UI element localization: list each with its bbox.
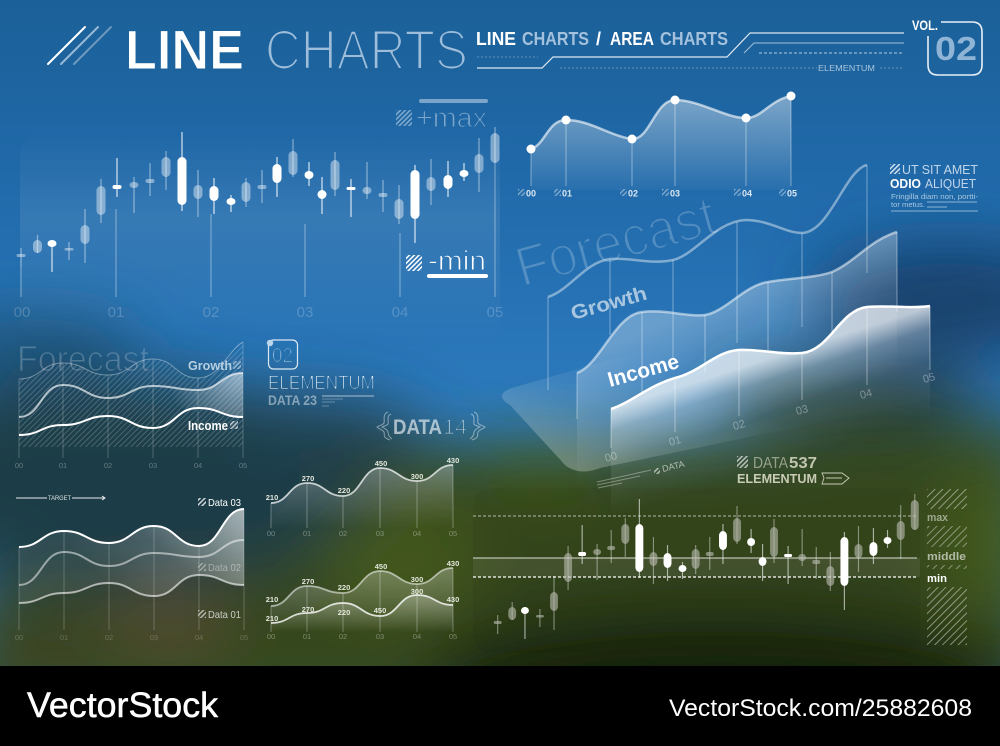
data537 label — [737, 455, 849, 486]
series chart axis: 05 — [240, 633, 248, 642]
double chart values: 220 — [338, 583, 350, 592]
series labels: Data 03 — [208, 497, 241, 509]
double chart axis: 03 — [376, 632, 384, 641]
chart: forecast small — [19, 342, 243, 458]
series labels — [198, 497, 241, 621]
double chart axis: 04 — [413, 632, 421, 641]
chart: three series — [19, 509, 244, 630]
area chart mid — [271, 465, 453, 528]
axis labels top chart: 00 — [14, 304, 30, 321]
double chart values: 270 — [302, 605, 314, 614]
text block top right: Fringilla diam non, portti- — [891, 192, 979, 201]
target arrow: TARGET — [48, 496, 71, 502]
forecast small axis: 01 — [59, 461, 67, 470]
panel: candlestick chart top — [20, 135, 500, 340]
volume badge — [912, 18, 982, 75]
perspective labels — [568, 283, 682, 392]
series labels: Data 02 — [208, 562, 241, 574]
forecast small axis: 00 — [15, 461, 23, 470]
perspective labels: Income — [605, 350, 682, 392]
text block top right: tor metus. — [891, 200, 925, 209]
title: LINE — [125, 18, 244, 81]
double chart values: 220 — [338, 608, 350, 617]
mid chart values: 430 — [447, 456, 459, 465]
footer logo: VectorStock — [27, 686, 219, 725]
legend bottom candle chart — [927, 489, 967, 645]
elementum block: DATA 23 — [268, 392, 317, 408]
mid chart values: 450 — [375, 459, 387, 468]
mid chart axis: 01 — [303, 529, 311, 538]
footer url: VectorStock.com/25882608 — [669, 695, 972, 722]
data14 heading: 14 — [443, 416, 467, 439]
elementum tag: ELEMENTUM — [818, 64, 875, 73]
logo stripes — [48, 27, 111, 64]
double chart values: 210 — [266, 595, 278, 604]
mid chart axis — [267, 529, 457, 538]
candlestick chart bottom — [494, 494, 919, 639]
data537 label: ELEMENTUM — [737, 472, 817, 486]
mid chart axis: 04 — [413, 529, 421, 538]
elementum block: 02 — [272, 345, 293, 367]
panel: candlestick chart bottom — [473, 488, 920, 653]
small data note — [597, 459, 685, 488]
data537 label: DATA — [753, 455, 789, 472]
elementum block: ELEMENTUM — [268, 372, 375, 394]
axis labels top chart: 05 — [487, 304, 503, 321]
mid chart values — [266, 456, 459, 502]
perspective forecast title: Forecast — [508, 183, 723, 299]
forecast small axis: 02 — [104, 461, 112, 470]
subtitle: / — [596, 29, 601, 49]
data14 heading — [377, 412, 485, 440]
double chart values: 300 — [411, 587, 423, 596]
axis labels top chart: 04 — [392, 304, 408, 321]
mid chart axis: 05 — [449, 529, 457, 538]
forecast small labels: Growth — [188, 359, 232, 373]
text block top right — [890, 162, 979, 211]
series chart axis: 02 — [105, 633, 113, 642]
text block top right: UT SIT AMET — [902, 162, 978, 177]
axis labels top chart: 02 — [203, 304, 219, 321]
double chart axis: 05 — [449, 632, 457, 641]
text block top right: ALIQUET — [925, 176, 976, 191]
perspective axis labels: 01 — [668, 434, 683, 449]
area chart top right: 01 — [562, 188, 572, 198]
series chart axis: 03 — [150, 633, 158, 642]
double chart values: 430 — [447, 559, 459, 568]
small forecast title: Forecast — [17, 338, 149, 379]
area chart double — [271, 568, 453, 632]
double chart values: 450 — [374, 606, 386, 615]
elementum block — [267, 340, 375, 408]
mid chart axis: 02 — [339, 529, 347, 538]
axis labels top chart — [14, 304, 503, 321]
mid chart values: 210 — [266, 493, 278, 502]
series chart axis: 04 — [195, 633, 203, 642]
perspective axis labels: 03 — [795, 403, 810, 418]
subtitle: AREA — [610, 29, 654, 49]
max label: +max — [416, 102, 487, 133]
double chart values: 300 — [411, 575, 423, 584]
max label — [396, 99, 488, 133]
reference band — [473, 558, 920, 577]
mid chart axis: 03 — [376, 529, 384, 538]
area chart top right: 02 — [628, 188, 638, 198]
series chart axis: 01 — [60, 633, 68, 642]
double chart axis: 01 — [303, 632, 311, 641]
series labels: Data 01 — [208, 609, 241, 621]
target arrow — [16, 496, 105, 502]
mid chart axis: 00 — [267, 529, 275, 538]
subtitle: CHARTS — [522, 29, 589, 49]
legend bottom candle chart: min — [927, 573, 947, 585]
axis labels top chart: 03 — [297, 304, 313, 321]
candlestick chart top — [16, 127, 500, 297]
volume badge: 02 — [935, 30, 977, 67]
double chart axis — [267, 632, 457, 641]
double chart values: 450 — [375, 562, 387, 571]
area chart top right: 05 — [787, 188, 797, 198]
double chart values — [266, 559, 459, 623]
forecast small labels: Income — [188, 419, 228, 433]
perspective axis labels: 02 — [732, 418, 747, 433]
text block top right: ODIO — [890, 176, 921, 191]
forecast small axis — [15, 461, 247, 470]
forecast small axis: 05 — [239, 461, 247, 470]
perspective axis labels: 05 — [922, 371, 937, 386]
min label — [406, 245, 488, 278]
subtitle: LINE — [476, 29, 516, 49]
area chart top right: 04 — [742, 188, 752, 198]
double chart axis: 00 — [267, 632, 275, 641]
series chart axis: 00 — [15, 633, 23, 642]
perspective axis labels: 04 — [859, 387, 874, 402]
volume badge: VOL. — [912, 18, 938, 33]
double chart values: 430 — [447, 595, 459, 604]
axis labels top chart: 01 — [108, 304, 124, 321]
area chart top right: 00 — [526, 188, 536, 198]
legend bottom candle chart: max — [927, 512, 949, 524]
mid chart values: 300 — [411, 472, 423, 481]
data537 label: 537 — [789, 455, 817, 472]
title: CHARTS — [265, 18, 468, 81]
perspective labels: Growth — [568, 283, 649, 325]
forecast small axis: 03 — [149, 461, 157, 470]
subtitle — [476, 29, 728, 49]
title — [125, 18, 468, 81]
header circuit lines — [477, 33, 904, 68]
area chart top right — [518, 92, 797, 198]
small data note: DATA — [661, 459, 685, 474]
mid chart values: 220 — [338, 486, 350, 495]
perspective area chart — [548, 165, 930, 520]
forecast small labels — [188, 359, 241, 433]
threshold lines — [473, 516, 917, 577]
data14 heading: DATA — [393, 416, 442, 439]
double chart values: 270 — [302, 577, 314, 586]
double chart axis: 02 — [339, 632, 347, 641]
subtitle: CHARTS — [660, 29, 728, 49]
perspective axis labels — [604, 371, 937, 465]
legend bottom candle chart: middle — [927, 551, 966, 563]
min label: -min — [428, 245, 486, 276]
forecast small axis: 04 — [194, 461, 202, 470]
double chart values: 210 — [266, 614, 278, 623]
footer bar — [0, 666, 1000, 746]
mid chart values: 270 — [302, 474, 314, 483]
perspective axis labels: 00 — [604, 450, 619, 465]
series chart axis — [15, 633, 248, 642]
area chart top right: 03 — [670, 188, 680, 198]
panel: perspective plate — [502, 270, 1000, 472]
